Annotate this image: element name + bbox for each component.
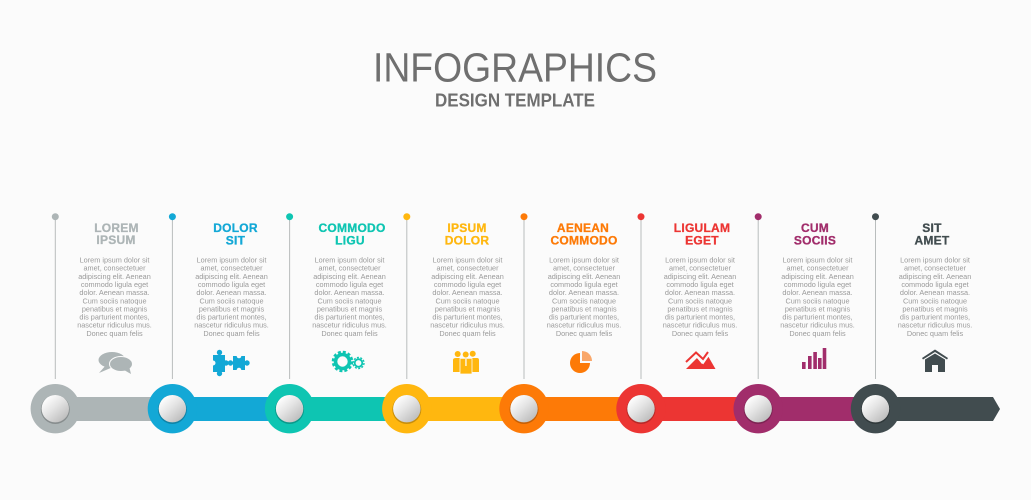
- icon: puzzle: [210, 350, 250, 376]
- text block 7: [780, 256, 855, 338]
- heading 4: [445, 221, 489, 248]
- text block 1: [77, 256, 152, 338]
- heading 2: SIT: [226, 234, 246, 248]
- text block 8: [898, 256, 972, 338]
- step 6: [616, 213, 737, 433]
- heading 8: SIT: [922, 221, 942, 235]
- text block 6: [663, 256, 737, 338]
- node 5: [499, 384, 549, 433]
- heading 1: LOREM: [94, 221, 139, 235]
- node 7: [734, 384, 783, 433]
- heading 3: COMMODO: [318, 221, 386, 235]
- step 7: [734, 213, 855, 433]
- text block 3: [312, 256, 387, 338]
- heading 7: SOCIIS: [794, 234, 836, 248]
- icon: bar chart: [802, 348, 826, 369]
- step 8: [851, 213, 972, 433]
- step 4: [382, 213, 505, 433]
- heading 8: [914, 221, 950, 248]
- icon: speech bubbles: [98, 352, 132, 374]
- step 3: [265, 213, 387, 433]
- node 6: [616, 384, 666, 433]
- step 2: [148, 213, 269, 433]
- node 3: [265, 384, 314, 433]
- icon: pie chart: [570, 351, 592, 373]
- heading 8: AMET: [914, 234, 950, 248]
- connector line 3: [286, 213, 293, 379]
- connector line 2: [169, 213, 176, 379]
- icon: team: [453, 351, 479, 374]
- node 1: [31, 384, 80, 433]
- node 4: [382, 384, 431, 433]
- heading 6: LIGULAM: [674, 221, 730, 235]
- timeline bar: [55, 397, 1000, 421]
- step 1: [31, 213, 152, 433]
- heading 4: IPSUM: [447, 221, 487, 235]
- heading 7: [794, 221, 836, 248]
- heading 3: [318, 221, 386, 248]
- title: INFOGRAPHICS: [373, 44, 657, 90]
- heading 1: IPSUM: [96, 233, 136, 247]
- connector line 1: [52, 213, 59, 379]
- subtitle: DESIGN TEMPLATE: [435, 90, 595, 110]
- connector line 8: [872, 213, 879, 379]
- connector line 6: [638, 213, 644, 379]
- connector line 7: [755, 213, 762, 379]
- node 8: [851, 384, 900, 433]
- heading 6: [674, 221, 730, 248]
- heading 2: DOLOR: [213, 221, 258, 235]
- heading 4: DOLOR: [445, 234, 489, 248]
- icon: gears: [333, 352, 364, 371]
- text block 4: [430, 256, 505, 338]
- icon: house: [922, 350, 948, 372]
- heading 5: AENEAN: [557, 221, 609, 235]
- heading 3: LIGU: [335, 234, 365, 248]
- heading 7: CUM: [801, 221, 829, 235]
- heading 2: [213, 221, 258, 248]
- text block 5: [547, 256, 621, 338]
- icon: line over mountains: [686, 352, 716, 369]
- text block 2: [194, 256, 269, 338]
- node 2: [148, 384, 197, 433]
- heading 5: COMMODO: [550, 234, 618, 248]
- step 5: [499, 213, 621, 433]
- heading 1: [94, 221, 139, 247]
- heading 5: [550, 221, 618, 248]
- connector line 5: [520, 213, 528, 379]
- heading 6: EGET: [685, 234, 719, 248]
- connector line 4: [403, 213, 410, 379]
